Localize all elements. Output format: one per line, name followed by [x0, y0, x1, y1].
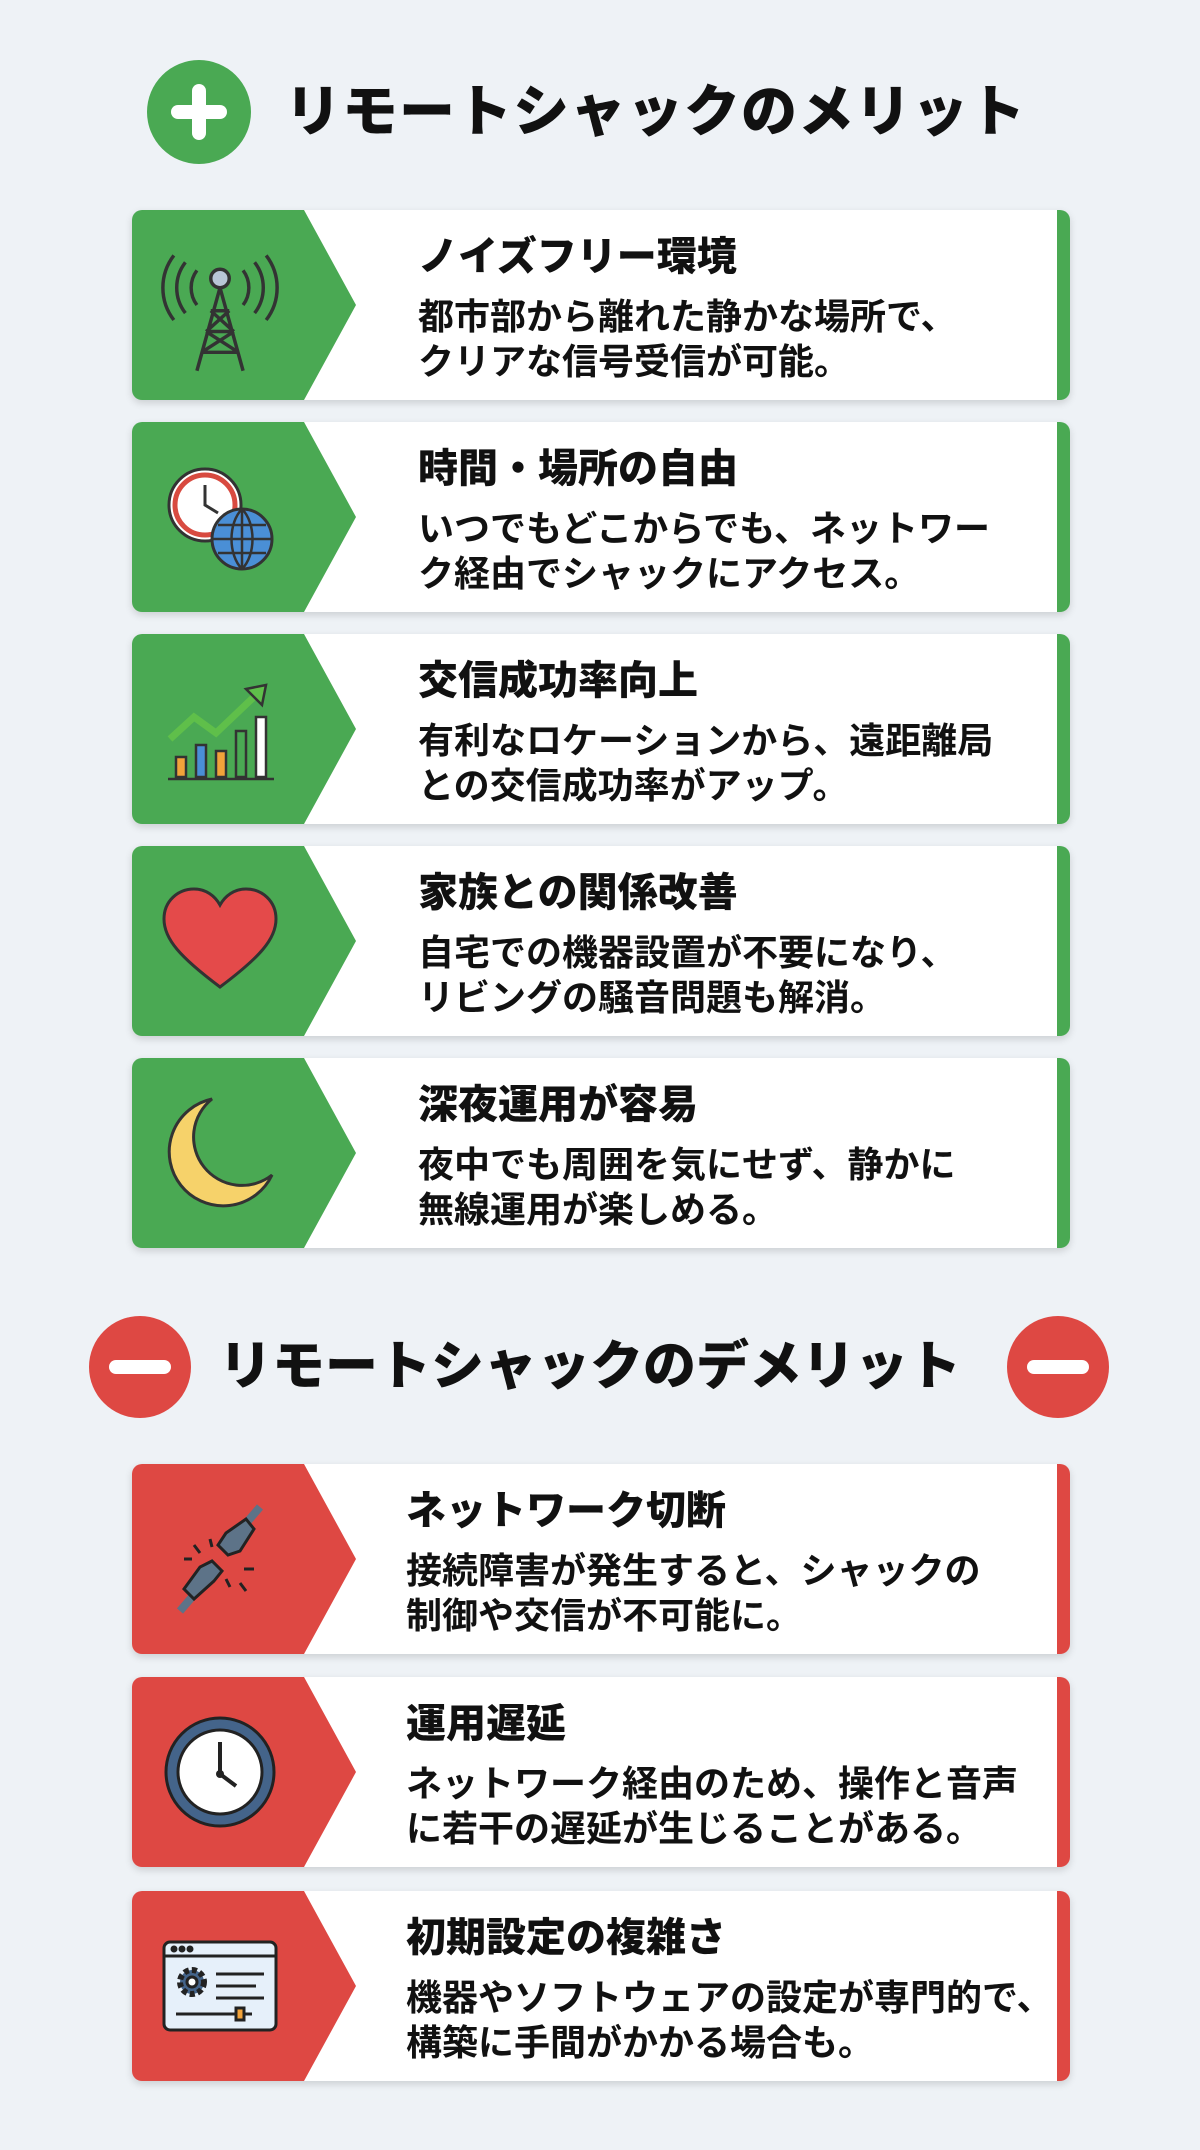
text: 深夜運用が容易 [418, 1083, 698, 1127]
icon: rising chart [168, 683, 274, 780]
text: 無線運用が楽しめる。 [418, 1189, 778, 1230]
text: 構築に手間がかかる場合も。 [406, 2022, 874, 2063]
text: クリアな信号受信が可能。 [418, 341, 850, 382]
text [418, 659, 993, 806]
text: 初期設定の複雑さ [406, 1916, 726, 1960]
text: 家族との関係改善 [418, 871, 738, 915]
text [418, 1082, 955, 1230]
icon: antenna tower [161, 254, 279, 372]
text: 都市部から離れた静かな場所で、 [418, 296, 957, 337]
text [406, 1489, 981, 1636]
text: ネットワーク経由のため、操作と音声 [406, 1763, 1018, 1804]
icon: plus circle [147, 60, 251, 164]
text: ネットワーク切断 [406, 1489, 726, 1533]
text [406, 1916, 1053, 2063]
text: 夜中でも周囲を気にせず、静かに [418, 1144, 955, 1185]
card: complex setup [132, 1891, 1070, 2081]
text: 交信成功率向上 [418, 659, 698, 703]
icon: minus circle right [1007, 1316, 1109, 1418]
card: QSO success rate [132, 634, 1070, 824]
icon: clock [164, 1716, 276, 1828]
icon: minus circle left [89, 1316, 191, 1418]
card: family relations [132, 846, 1070, 1036]
title text: リモートシャックのデメリット [219, 1337, 961, 1396]
text [418, 871, 957, 1018]
text: 時間・場所の自由 [418, 447, 738, 491]
text: ク経由でシャックにアクセス。 [418, 553, 920, 594]
text: 制御や交信が不可能に。 [406, 1595, 802, 1636]
text [418, 447, 990, 594]
card: network disconnect [132, 1464, 1070, 1654]
icon: moon [168, 1098, 274, 1208]
icon: clock and globe [168, 468, 274, 570]
icon: heart [162, 888, 278, 989]
text: 有利なロケーションから、遠距離局 [418, 720, 993, 761]
text: リビングの騒音問題も解消。 [418, 977, 886, 1018]
card: time and place freedom [132, 422, 1070, 612]
title text: リモートシャックのメリット [285, 80, 1026, 143]
text: 運用遅延 [406, 1702, 566, 1746]
text: 自宅での機器設置が不要になり、 [418, 932, 957, 973]
text: 接続障害が発生すると、シャックの [406, 1550, 981, 1591]
heading: merits [147, 60, 1026, 164]
icon: broken plug [177, 1504, 263, 1614]
text: ノイズフリー環境 [418, 235, 737, 279]
text: との交信成功率がアップ。 [418, 765, 849, 806]
card: latency [132, 1677, 1070, 1867]
text [406, 1702, 1018, 1849]
text: いつでもどこからでも、ネットワー [418, 508, 990, 549]
heading: demerits [89, 1316, 1109, 1418]
icon: settings window [162, 1940, 278, 2032]
card: late night operation [132, 1058, 1070, 1248]
card: noise free [132, 210, 1070, 400]
text [418, 234, 957, 382]
text: 機器やソフトウェアの設定が専門的で、 [406, 1977, 1053, 2018]
text: に若干の遅延が生じることがある。 [406, 1808, 982, 1849]
